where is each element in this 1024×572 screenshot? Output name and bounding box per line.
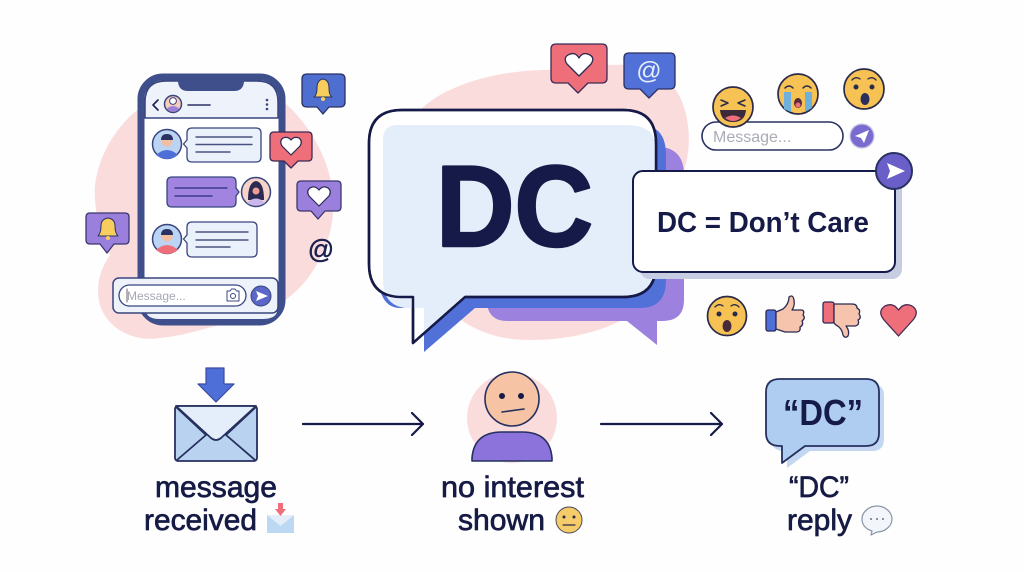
emoji: surprised bottom	[708, 296, 746, 336]
message input bar: Message...	[127, 289, 186, 303]
icon: red heart badge	[270, 132, 312, 168]
panel: step 1 message received	[144, 368, 294, 537]
inner light fill	[383, 125, 655, 331]
reply bubble	[766, 379, 879, 463]
icon: thumbs up	[766, 296, 804, 332]
panel: central DC speech bubble	[369, 44, 689, 352]
purple back bubble	[487, 147, 684, 345]
label: message received: message	[155, 471, 277, 504]
main bubble outline	[369, 110, 656, 343]
arrow: step 1 to step 2	[303, 413, 423, 435]
message input bar	[113, 278, 278, 313]
icon: red heart badge top	[551, 44, 607, 93]
person body	[472, 432, 552, 461]
icon: thumbs down	[823, 302, 860, 337]
panel: step 2 no interest shown	[441, 372, 585, 537]
pink blob behind bubble	[420, 65, 689, 340]
label: message received: received	[144, 504, 257, 537]
label: DC reply	[787, 471, 852, 537]
label: DC reply: reply	[787, 504, 852, 537]
label: DC reply: “DC”	[789, 471, 849, 504]
icon: small speech bubble	[862, 506, 892, 535]
icon: down arrow	[198, 368, 234, 402]
icon: at sign badge top: @	[636, 57, 662, 85]
emoji: laughing	[713, 87, 753, 127]
icon: send button	[876, 153, 912, 189]
panel: phone chat illustration	[86, 74, 345, 339]
icon: at sign badge top	[624, 53, 675, 98]
icon: envelope	[175, 406, 257, 461]
reply bubble shadow	[771, 384, 884, 468]
panel: definition and reactions	[633, 69, 916, 337]
icon: heart	[881, 305, 916, 336]
chat row: outgoing purple message	[167, 177, 270, 207]
main white bubble	[369, 110, 656, 343]
label: no interest shown	[441, 471, 585, 537]
message input pill	[702, 122, 843, 150]
pink circle background	[467, 373, 557, 463]
arrow: step 2 to step 3	[601, 413, 722, 435]
icon: small send button	[850, 124, 874, 148]
label: no interest shown: no interest	[441, 471, 585, 504]
definition card shadow	[640, 178, 902, 279]
reply bubble text: “DC”	[783, 392, 863, 433]
pink blob behind phone	[95, 103, 333, 339]
icon: purple bell badge	[86, 213, 129, 253]
big DC text: DC	[436, 143, 593, 271]
icon: blue bell badge	[302, 74, 345, 114]
icon: purple heart badge	[297, 181, 341, 219]
definition card	[633, 171, 895, 272]
phone header: back arrow, avatar, menu	[153, 96, 268, 112]
emoji: surprised top	[844, 69, 884, 109]
label: no interest shown: shown	[458, 504, 545, 537]
label: message received	[144, 471, 277, 537]
neutral face	[485, 372, 539, 426]
chat row: incoming message 1	[152, 128, 261, 162]
emoji: neutral face	[556, 507, 582, 533]
phone body	[141, 77, 282, 322]
message input pill: Message...	[713, 129, 791, 146]
definition text: DC = Don’t Care	[657, 207, 869, 239]
chat row: incoming message 2	[152, 222, 257, 257]
icon: small envelope	[267, 503, 294, 533]
emoji: crying	[778, 74, 818, 114]
icon: at sign: @	[308, 234, 334, 264]
blue middle bubble	[380, 125, 666, 352]
panel: step 3 DC reply	[766, 379, 892, 537]
